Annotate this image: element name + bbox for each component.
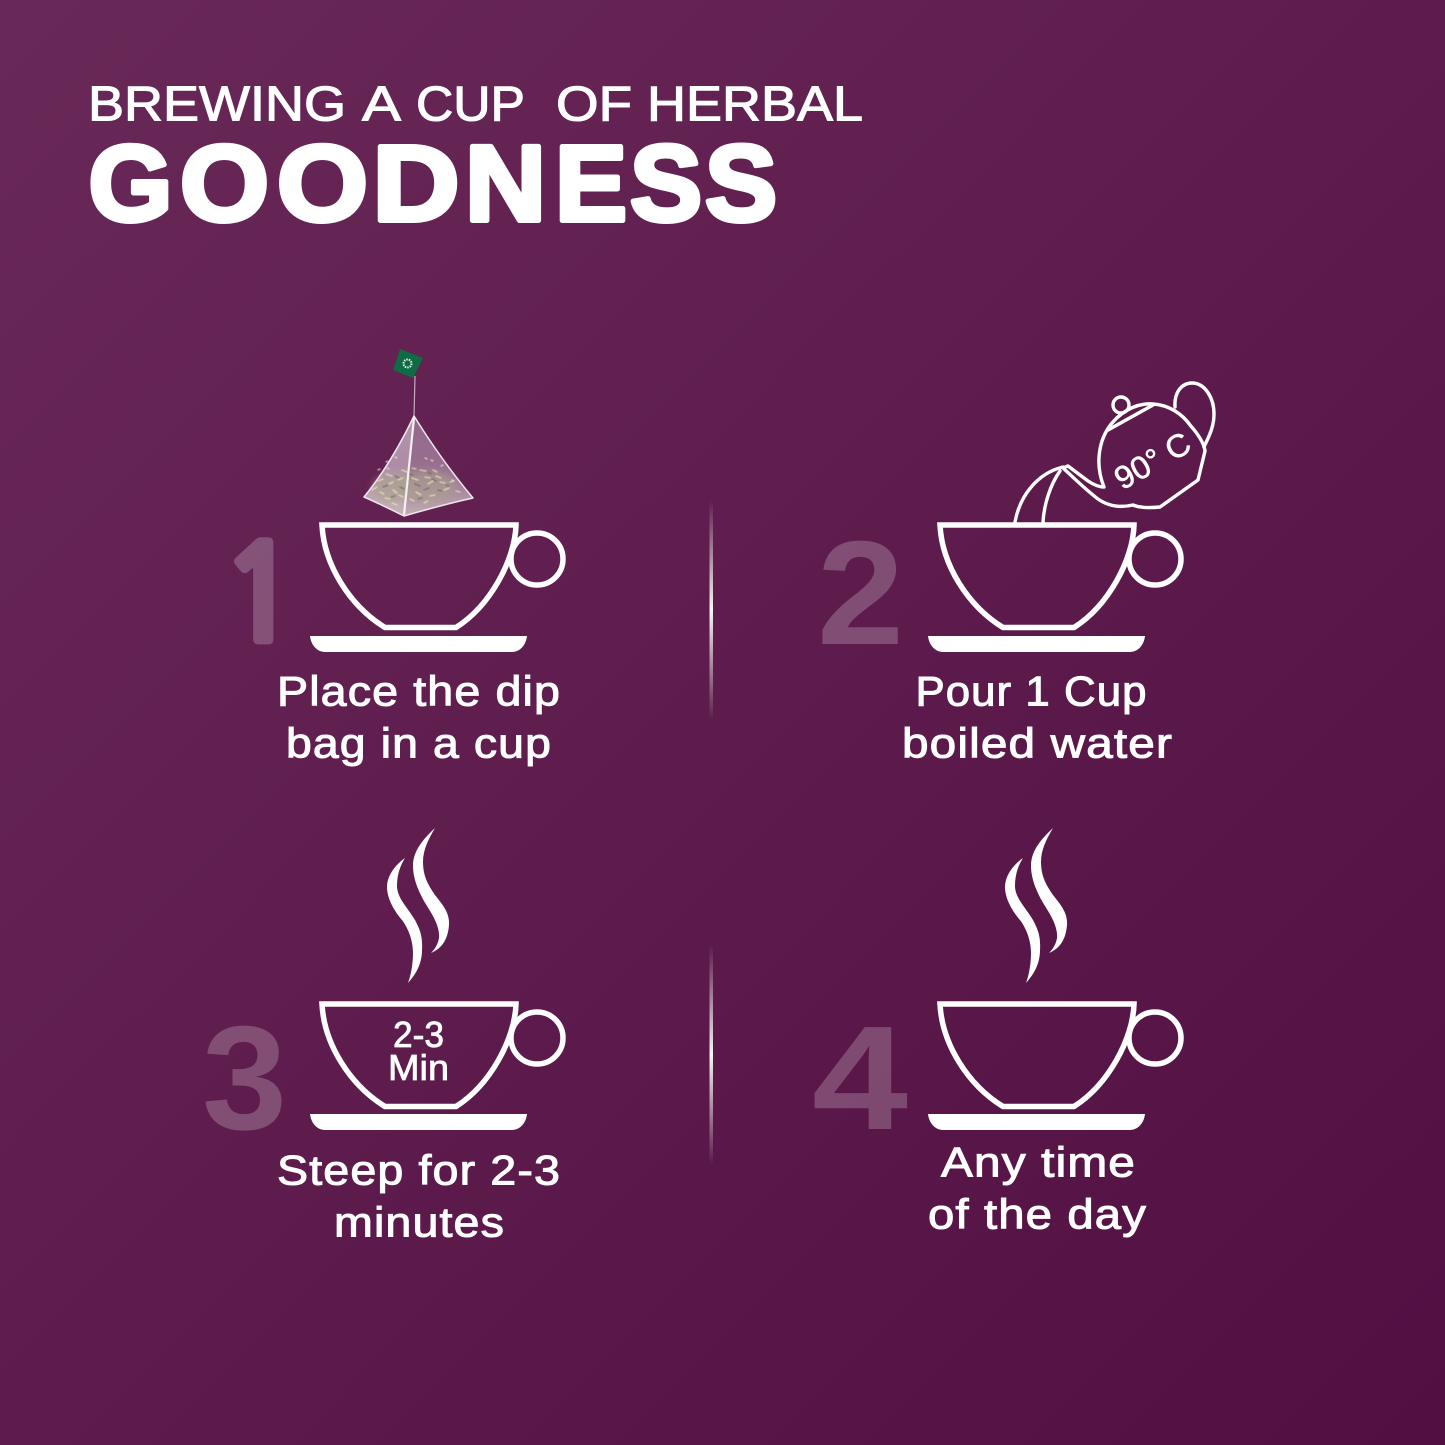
step 3 caption: [277, 1146, 561, 1246]
teapot temperature label: 90° C: [1108, 425, 1197, 497]
title line 1: CUP: [416, 78, 525, 132]
icon: cup: [928, 525, 1181, 652]
step 4 caption: Any time: [941, 1138, 1136, 1186]
title line 2: G: [88, 122, 173, 244]
step 1 caption: Place the dip: [277, 668, 561, 714]
title line 2: N: [465, 122, 546, 244]
step 2 number: 2: [817, 511, 904, 676]
title line 1: HERBAL: [647, 78, 863, 132]
title line 2: E: [555, 122, 627, 244]
icon: steam: [1005, 828, 1067, 983]
step 1 caption: bag in a cup: [286, 720, 552, 766]
step 3 caption: Steep for 2-3: [277, 1146, 561, 1194]
title line 2: S: [705, 122, 777, 244]
icon: cup: [310, 1004, 563, 1130]
icon: cup: [310, 525, 563, 652]
step 4 number: 4: [812, 996, 908, 1161]
title line 2: [88, 122, 777, 244]
step 2 panel: [817, 383, 1214, 766]
cup time label: Min: [388, 1047, 449, 1088]
step 1 caption: [277, 668, 561, 766]
step 2 caption: boiled water: [902, 720, 1173, 766]
step 4 caption: of the day: [928, 1190, 1147, 1238]
icon: teapot pouring: [1015, 383, 1214, 522]
step 1 panel: [220, 349, 563, 766]
step 2 caption: Pour 1 Cup: [916, 668, 1148, 714]
title line 2: D: [372, 122, 460, 244]
cup time label: [388, 1014, 449, 1088]
step 4 panel: [812, 828, 1181, 1238]
icon: steam: [387, 828, 449, 983]
step 4 caption: [928, 1138, 1147, 1238]
title line 2: S: [630, 122, 702, 244]
step 3 panel: [202, 828, 563, 1246]
title line 1: [88, 78, 863, 132]
title line 2: O: [180, 122, 269, 244]
cup time label: 2-3: [393, 1014, 444, 1055]
step 2 caption: [902, 668, 1173, 766]
step 3 caption: minutes: [334, 1198, 505, 1246]
step 3 number: 3: [202, 996, 287, 1161]
icon: tea bag: [364, 349, 473, 516]
divider: [710, 945, 713, 1165]
title line 1: A: [362, 78, 401, 132]
step 1 number: 1: [220, 529, 301, 661]
title line 2: O: [277, 122, 368, 244]
title line 1: OF: [556, 78, 632, 132]
divider: [710, 500, 713, 720]
icon: cup: [928, 1004, 1181, 1130]
title line 1: BREWING: [88, 78, 346, 132]
